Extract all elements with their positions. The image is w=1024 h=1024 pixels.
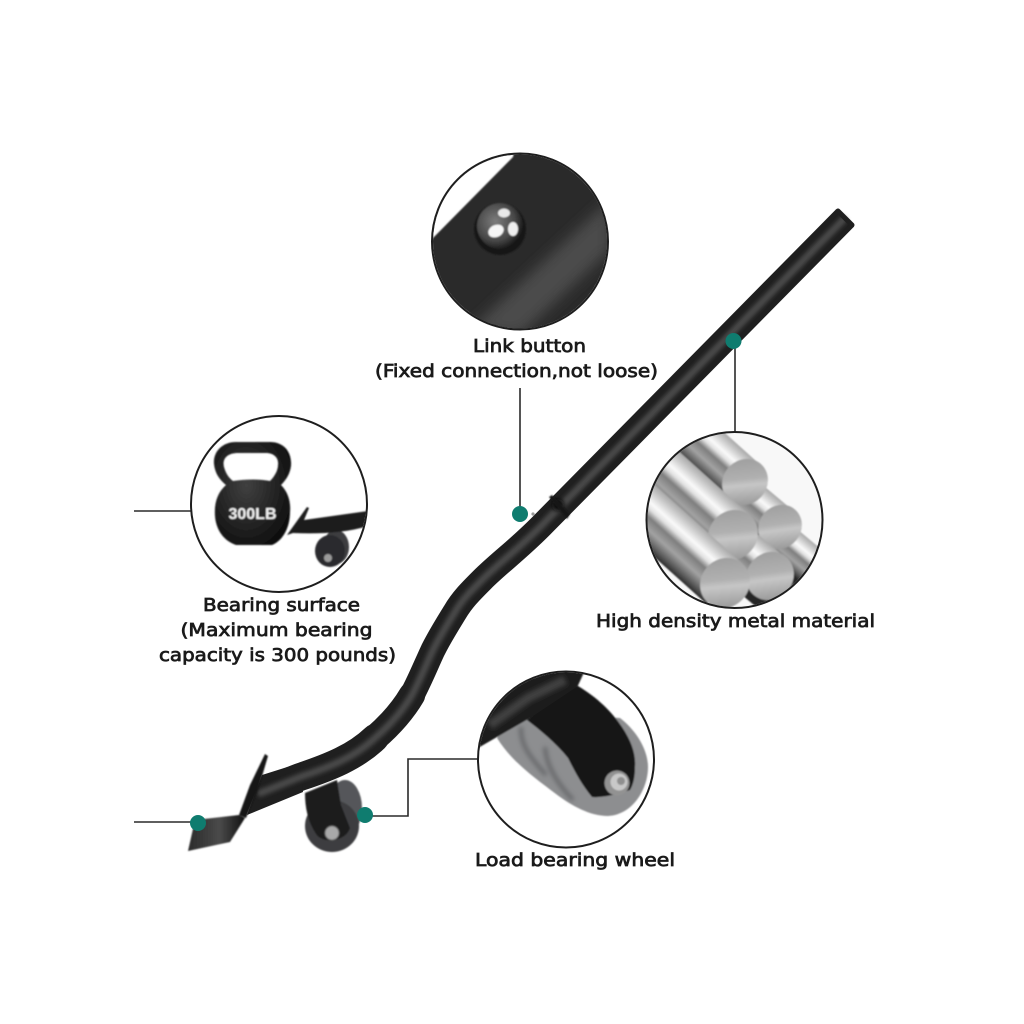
steel rods photo <box>648 434 818 607</box>
kettlebell and mini lifter illustration <box>214 442 368 567</box>
load bearing wheel on bar <box>305 780 362 852</box>
rod <box>654 452 759 558</box>
icon: steel ball <box>474 203 526 255</box>
label: bearing surface: Bearing surface <box>203 595 360 616</box>
leader line: plate <box>134 821 198 823</box>
label: load bearing wheel: Load bearing wheel <box>475 850 675 871</box>
rod <box>680 434 768 505</box>
label: bearing surface: capacity is 300 pounds) <box>159 645 396 666</box>
wheel close-up photo <box>480 672 649 817</box>
label: link button: (Fixed connection,not loose) <box>375 361 658 382</box>
label: link button <box>375 336 658 382</box>
handle tube <box>247 211 852 815</box>
teal marker dots <box>190 333 742 831</box>
leader line: bearing surface <box>134 510 191 512</box>
rod <box>738 534 795 601</box>
callout: bearing surface <box>159 416 396 666</box>
callout: link button <box>375 148 658 382</box>
label: bearing surface: (Maximum bearing <box>180 620 372 641</box>
handle joint collar <box>531 495 570 519</box>
icon: kettlebell <box>214 442 291 545</box>
leader line: link button <box>519 388 521 514</box>
rod <box>648 484 750 607</box>
mini lifter <box>287 507 368 567</box>
lifting plate <box>188 754 268 851</box>
callout: load bearing wheel <box>470 660 675 871</box>
icon: kettlebell: 300LB <box>228 506 276 523</box>
leader line: metal material <box>734 341 736 433</box>
leader line: wheel <box>365 759 478 816</box>
icon: hex bolt <box>604 770 630 796</box>
label: metal material: High density metal material <box>596 611 875 632</box>
rod <box>738 488 802 549</box>
callout: metal material <box>598 431 874 631</box>
label: bearing surface <box>159 595 396 666</box>
link button photo <box>433 154 607 328</box>
rod <box>776 532 818 579</box>
lifting bar product <box>188 211 852 852</box>
label: link button: Link button <box>473 336 586 357</box>
